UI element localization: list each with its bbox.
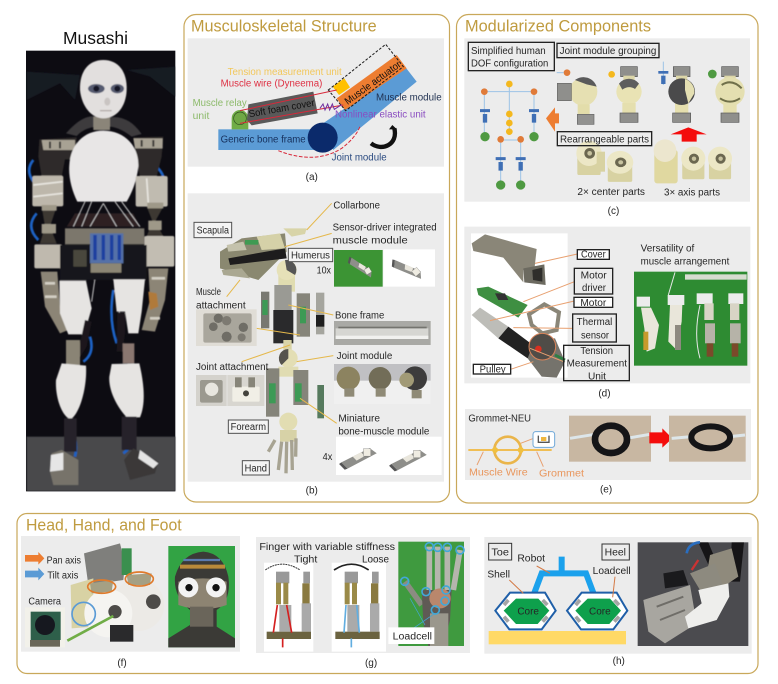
arm wraps xyxy=(32,176,63,206)
labels (b): Collarbone xyxy=(333,200,380,211)
diagram (h): foot xyxy=(484,537,752,654)
elbow ball joint xyxy=(279,340,298,368)
labels (b): Muscle xyxy=(196,287,221,298)
labels (a): Soft foam cover xyxy=(248,98,316,120)
labels (d): Motor xyxy=(581,270,607,281)
labels (f): Pan axis xyxy=(47,555,81,566)
labels (b): Scapula xyxy=(197,225,229,236)
labels (c) xyxy=(468,42,720,199)
diagram (d) and (e) xyxy=(464,227,751,495)
leader lines xyxy=(227,203,337,423)
labels (h): Toe xyxy=(491,547,509,558)
photo: bone frame xyxy=(334,321,431,345)
center parts xyxy=(576,141,633,182)
photo: sensor-driver muscle module xyxy=(334,249,435,288)
DOF stick figure xyxy=(480,81,539,190)
heading: Musashi: Musashi xyxy=(63,28,128,48)
labels (b): Sensor-driver integrated xyxy=(333,223,437,234)
labels (c): DOF configuration xyxy=(471,59,548,70)
leader lines xyxy=(490,254,577,369)
labels (b): Humerus xyxy=(291,251,330,262)
labels (d): Unit xyxy=(588,371,606,382)
labels (b): Bone frame xyxy=(335,310,385,321)
labels (h): Heel xyxy=(605,547,626,558)
labels (b): Miniature xyxy=(338,414,380,425)
labels (h): Loadcell xyxy=(593,566,631,577)
caption (b): (b) xyxy=(306,485,318,496)
photo: muscle attachment plate xyxy=(196,309,257,346)
diagram (a): muscle structure xyxy=(188,38,444,183)
labels (e): Muscle Wire xyxy=(469,468,528,479)
photo: Musashi full-body robot xyxy=(26,51,175,491)
labels (a): Muscle module xyxy=(376,93,442,104)
labels (h): Shell xyxy=(487,569,510,580)
labels (b) xyxy=(194,200,437,475)
photo: versatility of muscle arrangement xyxy=(634,272,747,366)
scapula cluster xyxy=(220,228,307,280)
muscle actuator xyxy=(337,55,407,110)
labels (d): Pulley xyxy=(480,365,506,376)
muscle wires xyxy=(240,90,343,123)
labels (c): Joint module grouping xyxy=(560,46,656,57)
labels (d): driver xyxy=(582,283,607,294)
head render xyxy=(67,543,164,642)
labels (h) xyxy=(487,543,631,617)
labels (e) xyxy=(468,414,584,480)
label: Loadcell xyxy=(388,627,434,644)
labels (d): Versatility of xyxy=(641,244,695,255)
photo: joint attachment xyxy=(196,375,264,406)
diagram (b): exploded arm xyxy=(188,193,444,496)
feet xyxy=(50,450,78,485)
photo: miniature modules xyxy=(336,437,442,475)
axis arrows xyxy=(25,552,44,580)
panel: Musculoskeletal Structure xyxy=(184,14,450,502)
tension measurement block xyxy=(333,78,350,95)
labels (b): Hand xyxy=(245,464,267,475)
photo: joint modules xyxy=(334,364,431,404)
diagrams (f) and (g) xyxy=(21,536,470,669)
lower legs xyxy=(64,418,77,452)
labels (d): Measurement xyxy=(567,359,627,370)
labels (b): Joint module xyxy=(337,351,393,362)
labels (g): Loose xyxy=(362,555,389,566)
labels (d): Cover xyxy=(581,250,606,261)
labels (b): Joint attachment xyxy=(196,362,269,373)
red dashed arc xyxy=(278,127,360,157)
labels (d): muscle arrangement xyxy=(641,256,730,267)
caption (g): (g) xyxy=(365,658,377,669)
shoulders xyxy=(38,137,77,177)
hand photo and diagram (h) xyxy=(388,537,752,667)
panel: Head, Hand, and Foot xyxy=(17,514,758,674)
label: Loadcell: Loadcell xyxy=(393,631,432,642)
labels (b): bone-muscle module xyxy=(338,426,430,437)
arrow: orange left xyxy=(546,107,559,132)
forearm modules xyxy=(266,367,324,418)
knees xyxy=(66,340,80,365)
hand xyxy=(268,413,297,473)
foot shell left xyxy=(495,593,556,629)
labels (a): Muscle actuator xyxy=(343,59,404,107)
labels (e): Grommet-NEU xyxy=(468,414,531,425)
caption (h): (h) xyxy=(613,656,625,667)
labels (a) xyxy=(193,59,442,164)
labels (c): Simplified human xyxy=(471,46,546,57)
labels (g): Tight xyxy=(294,555,318,566)
caption (d): (d) xyxy=(598,389,611,400)
labels (a): Muscle relay xyxy=(193,98,247,109)
labels (a): Generic bone frame xyxy=(221,135,306,146)
panel: Modularized Components xyxy=(456,14,758,503)
photo: foot mechanism xyxy=(638,542,748,646)
arrow: red right xyxy=(649,428,672,448)
dashed outline: muscle module xyxy=(328,44,403,111)
labels (g) xyxy=(259,542,395,566)
muscle relay unit xyxy=(232,110,248,129)
labels (a): Tension measurement unit xyxy=(228,67,342,78)
photo: grommet before xyxy=(569,416,651,462)
foot shell right xyxy=(567,593,627,629)
labels (d): Thermal xyxy=(577,317,612,328)
labels (e): Grommet xyxy=(539,469,584,480)
bone frame xyxy=(218,67,417,150)
labels (f): Tilt axis xyxy=(47,570,78,581)
diagram (g): finger with variable stiffness xyxy=(256,537,470,653)
pelvis xyxy=(65,228,144,244)
labels (f): Camera xyxy=(28,596,61,607)
ground xyxy=(489,631,626,644)
caption (e): (e) xyxy=(600,484,612,495)
grommet schematic xyxy=(468,432,555,467)
heading: Musculoskeletal Structure: Musculoskeletal Structure xyxy=(191,17,377,36)
leader lines xyxy=(509,566,615,597)
head xyxy=(80,60,127,118)
soft foam cover xyxy=(247,92,318,125)
exploded muscle module xyxy=(471,233,568,378)
labels (d): Motor xyxy=(580,298,607,309)
labels (a): unit xyxy=(193,111,210,122)
labels (g): Finger with variable stiffness xyxy=(259,542,395,553)
shoulder ball joint xyxy=(277,260,297,292)
photo: robot face xyxy=(168,546,235,647)
labels (b): attachment xyxy=(196,300,246,311)
labels (a): Nonlinear elastic unit xyxy=(335,109,426,120)
robot frame xyxy=(533,557,595,597)
photo: camera xyxy=(25,607,65,647)
labels (c): 2× center parts xyxy=(577,187,645,198)
labels (a): Muscle wire (Dyneema) xyxy=(221,79,322,90)
labels (c): 3× axis parts xyxy=(664,188,720,199)
torso shell xyxy=(69,131,138,202)
heading: Head, Hand, and Foot: Head, Hand, and Foot xyxy=(26,516,182,535)
labels (h): Core xyxy=(517,606,539,617)
labels (c): Rearrangeable parts xyxy=(560,135,649,146)
labels (b): muscle module xyxy=(333,235,408,246)
labels (b): Forearm xyxy=(231,422,266,433)
arm joints xyxy=(40,207,57,243)
axis parts xyxy=(654,139,732,183)
labels (d): sensor xyxy=(581,330,610,341)
photo: robot hand xyxy=(398,542,464,646)
joint module renders xyxy=(557,62,745,124)
arrow: red up xyxy=(671,127,707,142)
photo: grommet after xyxy=(669,416,746,462)
finger: loose xyxy=(332,563,386,652)
caption (c): (c) xyxy=(608,206,619,217)
shins xyxy=(56,363,86,419)
upper arm modules xyxy=(261,285,324,343)
labels (h): Robot xyxy=(517,554,545,565)
labels (d): Tension xyxy=(580,346,613,357)
labels (f) xyxy=(28,555,81,607)
finger: tight xyxy=(264,563,313,652)
labels (d) xyxy=(473,244,730,382)
joint module circle xyxy=(308,123,338,153)
caption (f): (f) xyxy=(117,658,127,669)
labels (h): Core xyxy=(589,606,611,617)
rotation arrow xyxy=(371,125,397,147)
nonlinear spring xyxy=(320,104,342,110)
diagram (c): joint modules xyxy=(464,38,750,217)
labels (a): Joint module xyxy=(332,153,387,164)
labels (b): 10x xyxy=(317,265,331,276)
wires xyxy=(67,213,140,227)
diagram (e): Grommet-NEU xyxy=(465,409,751,480)
labels (b): 4x xyxy=(323,452,332,463)
heading: Modularized Components: Modularized Components xyxy=(465,17,651,36)
blue tubes xyxy=(29,160,164,457)
neck collar xyxy=(66,116,142,137)
thighs xyxy=(59,281,92,334)
caption (a): (a) xyxy=(306,172,318,183)
